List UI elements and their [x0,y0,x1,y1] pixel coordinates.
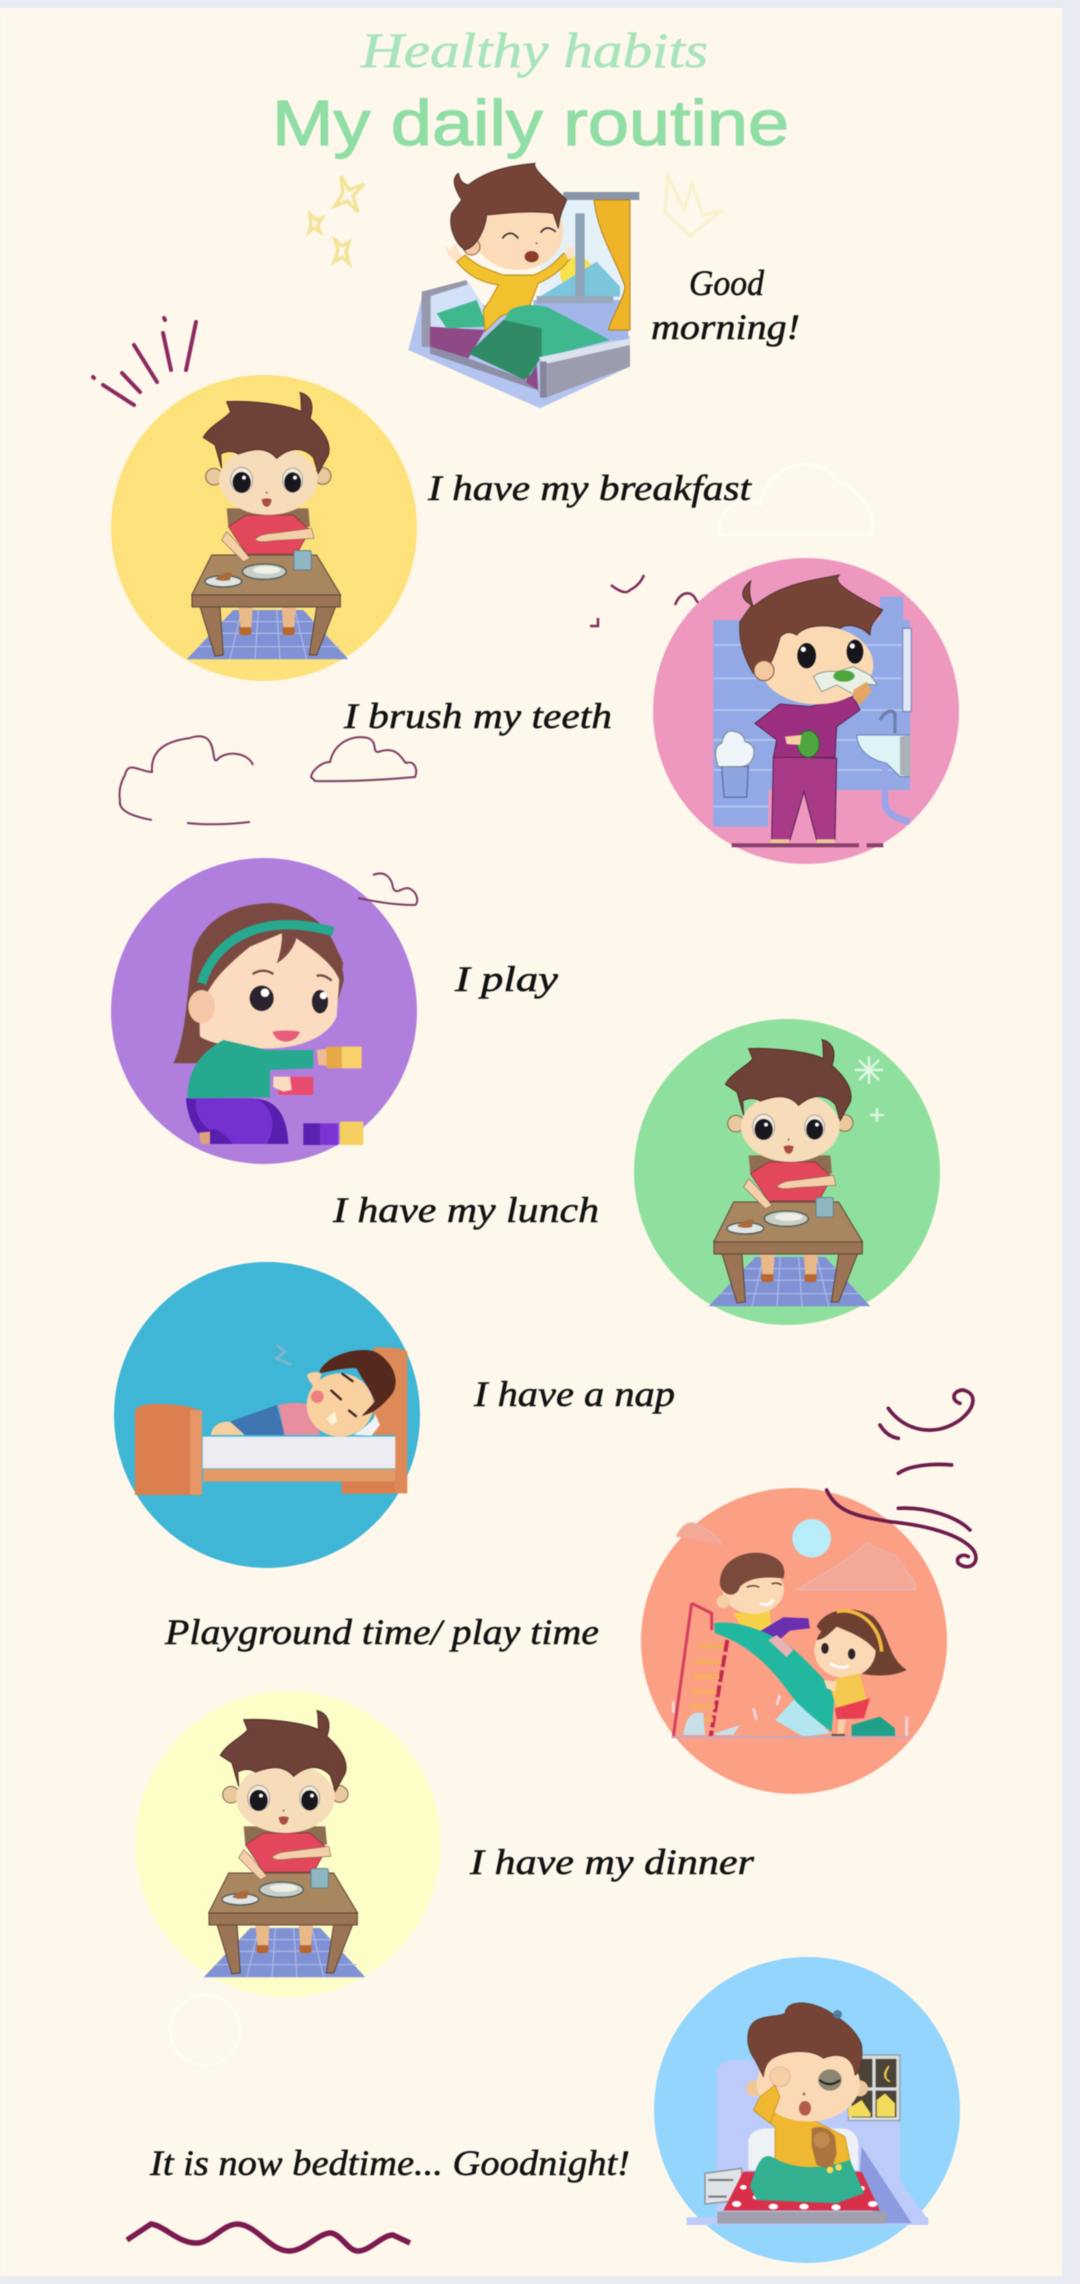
circle: light blue [654,1957,960,2263]
illustration: boy eating dinner [204,1711,365,1977]
illustration: children on a slide [672,1519,915,1738]
decoration: birds [590,575,714,626]
illustration: boy eating lunch [709,1040,870,1306]
panel: breakfast [111,375,417,681]
decoration: wavy underline [127,2224,410,2251]
caption: Good morning!: morning! [651,307,800,347]
illustration: boy eating breakfast [187,393,348,659]
circle: green [634,1019,940,1325]
caption: Good morning! [651,263,800,347]
caption: I have a nap: I have a nap [473,1374,675,1414]
caption: I have my breakfast: I have my breakfast [427,468,752,508]
illustration: boy waking up in bed [408,163,639,408]
decoration: small cloud [358,873,417,905]
panel: lunch [634,1019,940,1325]
caption: I have my dinner: I have my dinner [469,1842,755,1882]
decoration: wind swirls [827,1390,976,1567]
circle: blue [114,1262,420,1568]
decoration: faint crown [665,176,722,236]
panel: playground [641,1488,947,1794]
illustration: boy brushing teeth [713,575,911,847]
icon: white sparkles [855,1056,884,1122]
illustration: child napping in bed [135,1345,407,1495]
panel: dinner [135,1691,441,1997]
decoration: outlined clouds [119,736,416,824]
illustration: girl playing with blocks [173,903,363,1145]
circle: salmon [641,1488,947,1794]
panel: brushing teeth [653,558,959,864]
decoration: faint sun [170,1995,240,2065]
caption: I play: I play [454,959,558,999]
circle: pale yellow [135,1691,441,1997]
caption: Playground time/ play time: Playground time/ play time [164,1612,599,1652]
heading: Healthy habits: Healthy habits [360,22,708,78]
caption: I have my lunch: I have my lunch [332,1190,599,1230]
title: My daily routine: My daily routine [272,87,789,159]
circle: purple [111,858,417,1164]
circle: yellow [111,375,417,681]
panel: bedtime [654,1957,960,2263]
decoration: burst marks [93,318,196,405]
caption: Good morning!: Good [689,263,765,303]
panel: nap [114,1262,420,1568]
caption: I brush my teeth: I brush my teeth [343,696,612,736]
decoration: yellow stars [309,176,364,263]
illustration: sleepy boy on bed [687,2003,928,2225]
decoration: faint white cloud [719,464,873,535]
caption: It is now bedtime... Goodnight!: It is now bedtime... Goodnight! [149,2143,630,2183]
panel: play [111,858,417,1164]
circle: pink [653,558,959,864]
